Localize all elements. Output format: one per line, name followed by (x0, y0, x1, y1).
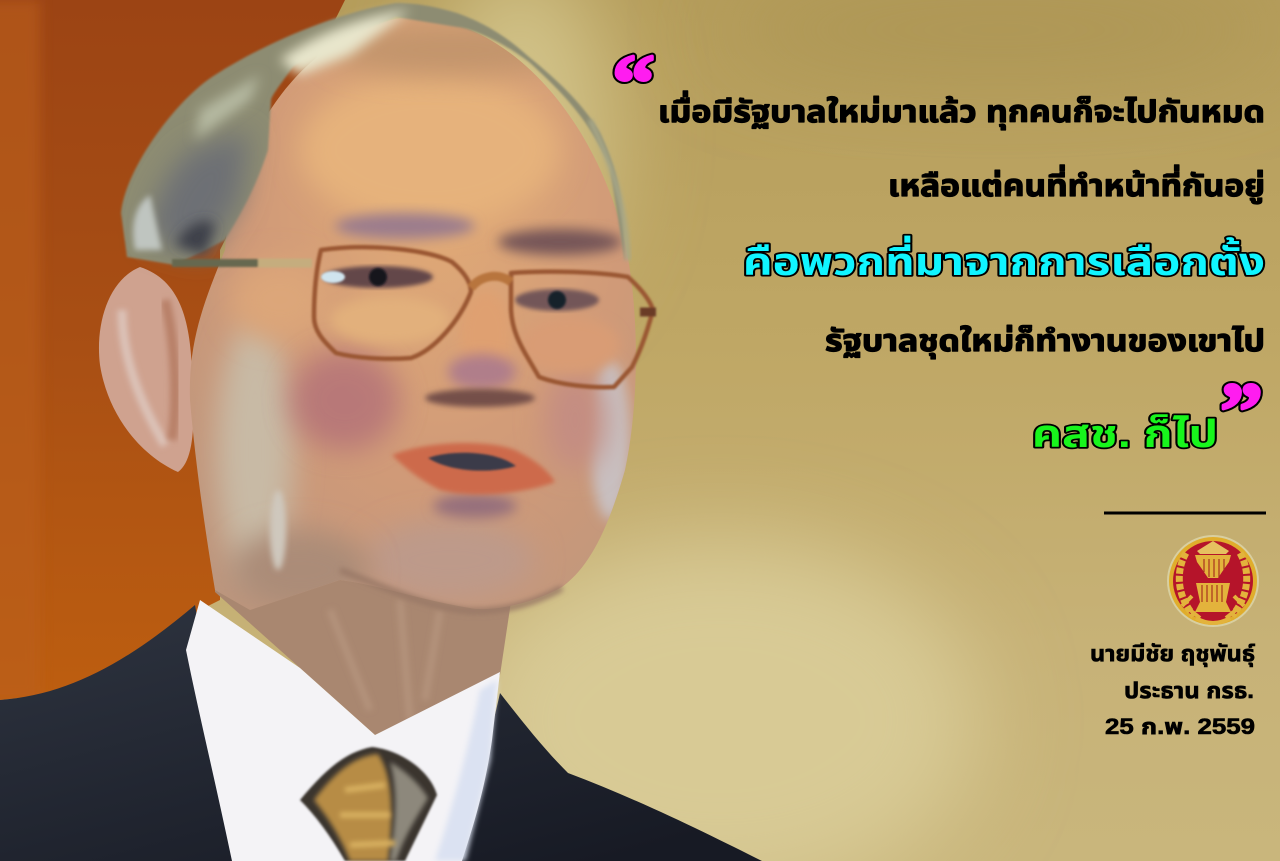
attribution (1090, 641, 1255, 739)
portrait of the speaker (0, 0, 762, 861)
eyeglasses (172, 247, 656, 387)
quote line 5: highlighted: คสช. ก็ไป (1032, 414, 1218, 456)
mouth (392, 443, 555, 494)
opening quotation mark: “ (612, 40, 655, 128)
quote line 3: highlighted: คือพวกที่มาจากการเลือกตั้ง (743, 235, 1265, 284)
quote text (612, 40, 1265, 456)
quote line 1: เมื่อมีรัฐบาลใหม่มาแล้ว ทุกคนก็จะไปกันหมด (658, 90, 1265, 130)
shirt collar (186, 600, 500, 861)
hair (121, 3, 628, 265)
background: wooden panel (0, 0, 345, 700)
neck tie (300, 747, 437, 861)
opening quotation mark: “ (612, 40, 655, 128)
eyes (321, 266, 599, 311)
ear (99, 267, 194, 472)
quote line 2: เหลือแต่คนที่ทำหน้าที่กันอยู่ (888, 164, 1265, 204)
neck (215, 575, 515, 735)
closing quotation mark: ” (1220, 368, 1263, 456)
speaker title: ประธาน กรธ. (1124, 678, 1254, 703)
divider rule (1104, 512, 1266, 514)
jaw shadow (340, 570, 562, 611)
face (190, 18, 636, 610)
date: 25 ก.พ. 2559 (1105, 714, 1255, 739)
closing quotation mark: ” (1220, 368, 1263, 456)
speaker name: นายมีชัย ฤชุพันธุ์ (1090, 641, 1255, 667)
quote line 4: รัฐบาลชุดใหม่ก็ทำงานของเขาไป (825, 324, 1265, 359)
emblem: National Assembly of Thailand seal (1167, 535, 1259, 627)
suit jacket (0, 605, 762, 861)
